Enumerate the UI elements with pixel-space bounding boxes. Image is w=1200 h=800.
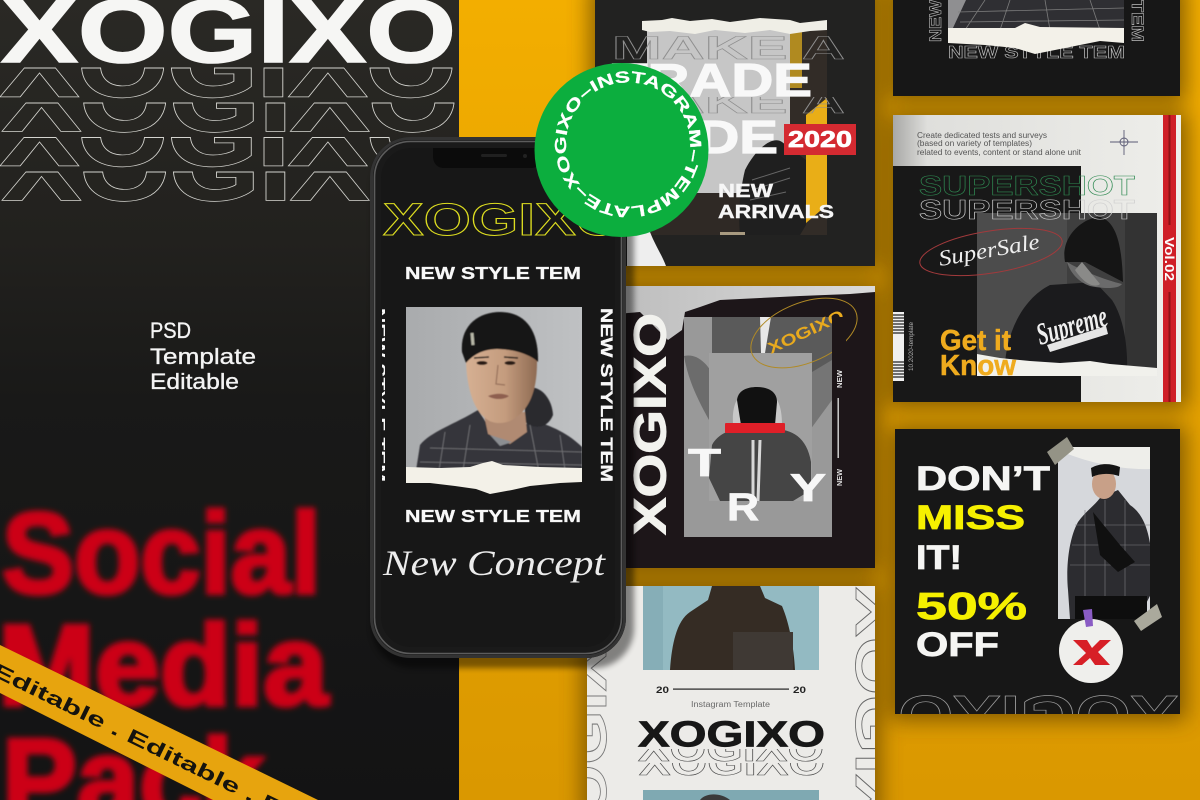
heading: DON'T MISS IT! 50% OFF: OFF [916,626,999,664]
label: 20 line 20: 20 [793,685,806,696]
text block: PSD Template Editable: Editable [150,369,239,394]
heading: TRADE: TRADE [612,54,812,106]
panel: Instagram Template card [587,586,875,800]
red side strip with Vol.02: Vol.02 [1162,237,1177,281]
label: 20 line 20 [656,685,806,696]
outlined rows: XOGIXO [638,728,824,769]
vertical heading: XOGIXO: XOGIXO [624,313,676,535]
text block: PSD Template Editable: PSD [150,318,191,343]
screen heading: XOGIXO outline: XOGIXO [383,194,623,245]
outlined text MAKE A: MAKE A [612,30,845,66]
screen torn paper [406,461,582,494]
photo: person in Supreme jacket: Supreme [1032,298,1111,352]
photo: person in Supreme jacket [977,213,1157,376]
blurred red heading: Social Media Pack: Social [2,490,321,618]
notch [433,148,542,168]
heading: DON'T MISS IT! 50% OFF: MISS [916,499,1025,537]
inner grey photo: person holding head [709,353,812,501]
outlined rows: XOGIXO [639,742,825,783]
outlined echo rows of the headline: XOGIXO [3,50,458,150]
dark side strip: NEW labels: NEW [835,468,844,486]
title: XOGIXO black: XOGIXO [638,714,825,754]
panel: TRY card [610,284,875,568]
photo: bottom teal crop [643,790,819,800]
phone body [370,137,626,658]
tape: purple [1083,609,1093,627]
dark side strip: NEW labels: NEW [835,369,844,388]
screen [381,148,615,647]
screen text: NEW STYLE TEM bottom: NEW STYLE TEM [405,506,581,526]
icon: crosshair [1110,130,1138,155]
tape: bottom [1134,604,1162,631]
photo: plaid jacket crop [948,0,1124,32]
phone mockup [370,137,626,658]
text: Instagram Template: Instagram Template [691,700,771,709]
phone shadow [372,146,634,668]
vertical outlined text: TEM: TEM [1128,0,1147,42]
letters: T R Y: Y [790,467,826,510]
panel: Don't miss it card [895,429,1180,714]
vertical outlined text: NEW: NEW [926,0,945,42]
outlined echo rows of the headline: XOGIXO [1,16,456,116]
outlined text: NEW STYLE TEM: NEW STYLE TEM [948,42,1125,62]
outlined echo rows of the headline: XOGIXO [1,85,456,185]
heading: Get it Know: Get it [940,325,1011,357]
screen script: New Concept: New Concept [382,543,606,583]
label: 20 line 20: 20 [656,685,669,696]
red side strip with Vol.02 [1162,115,1177,402]
text: NEW ARRIVALS [718,180,834,222]
outlined echo rows of the headline: XOGIXO [3,120,458,220]
heading: TRADE second line: TRADE [578,111,778,163]
panel: NEW STYLE TEM cropped card [893,0,1180,96]
panel: left dark panel [0,0,459,800]
text: NEW ARRIVALS: ARRIVALS [718,201,834,222]
outlined echo MAKE A: MAKE A [612,84,845,120]
photo: coat on teal [643,586,819,670]
panel: SUPERSHOT card [893,115,1181,402]
body text [917,131,1082,157]
letters: T R Y: R [727,486,759,529]
gold ellipse with XOGIXO: XOGIXO [766,308,847,358]
screen text: NEW STYLE TEM top: NEW STYLE TEM [405,263,581,283]
heading: Get it Know [940,325,1016,382]
outlined text: SUPERSHOT white: SUPERSHOT [919,194,1135,225]
blurred red heading: Social Media Pack: Media [0,602,329,730]
photo: grey backdrop and denim [684,317,832,537]
text block: PSD Template Editable: Template [150,344,256,369]
screen vertical text right: NEW STYLE TEM [597,308,615,482]
letters: T R Y [688,442,826,529]
body text: related to events, content or stand alone unit [917,148,1082,157]
card shadows [582,0,1188,800]
text block: PSD Template Editable [150,318,256,394]
barcode [893,312,904,381]
heading: DON'T MISS IT! 50% OFF: IT! [916,539,962,577]
badge: 2020 [784,124,856,155]
gold ellipse with XOGIXO [741,284,867,382]
heading: DON'T MISS IT! 50% OFF [916,460,1050,664]
outlined echo rows of the headline: XOGIXO [1,16,456,116]
photo: wall with boots [647,28,827,235]
text: NEW ARRIVALS: NEW [718,180,774,201]
blurred red heading: Social Media Pack [0,490,329,800]
small vertical label: 10.2020-template [909,321,915,371]
screen portrait photo [406,307,582,477]
badge: green circular stamp [534,63,708,237]
screen vertical text left clipped: NEW STYLE TEM [370,308,388,482]
letters: T R Y: T [688,442,721,485]
badge: X sticker [1059,619,1123,683]
dark block [893,166,1081,402]
outlined flipped XOGIXO: XOGIXO [898,684,1178,746]
outlined echo rows of the headline: XOGIXO [1,85,456,185]
panel: TRADE 2020 card [578,0,875,266]
badge: 2020: 2020 [788,126,852,152]
torn paper strip [948,23,1124,54]
torn photo top strip [610,286,875,340]
outlined rows [638,749,824,776]
torn white corner [627,232,666,266]
heading: Get it Know: Know [940,350,1016,382]
circular text: –INSTAGRAM–TEMPLATE–XOGIXO [554,71,702,218]
script text: SuperSale: SuperSale [937,229,1042,271]
tape: top [1047,437,1074,465]
heading: DON'T MISS IT! 50% OFF: DON’T [916,460,1050,498]
torn paper strip [642,18,827,34]
dark side strip: NEW labels [832,317,846,537]
photo: person with bag [1058,447,1152,619]
red ellipse [917,220,1065,284]
outlined echo rows of the headline [0,68,454,202]
heading: DON'T MISS IT! 50% OFF: 50% [916,586,1027,628]
body text: Create dedicated tests and surveys [917,131,1047,140]
outlined echo rows of the headline: XOGIXO [3,120,458,220]
outlined echo rows of the headline: XOGIXO [3,50,458,150]
ribbon: Editable tape [0,645,318,800]
outlined text: SUPERSHOT green: SUPERSHOT [919,170,1135,201]
body text: (based on variety of templates) [917,139,1032,148]
torn paper strip [977,354,1157,376]
red bar [725,423,785,433]
